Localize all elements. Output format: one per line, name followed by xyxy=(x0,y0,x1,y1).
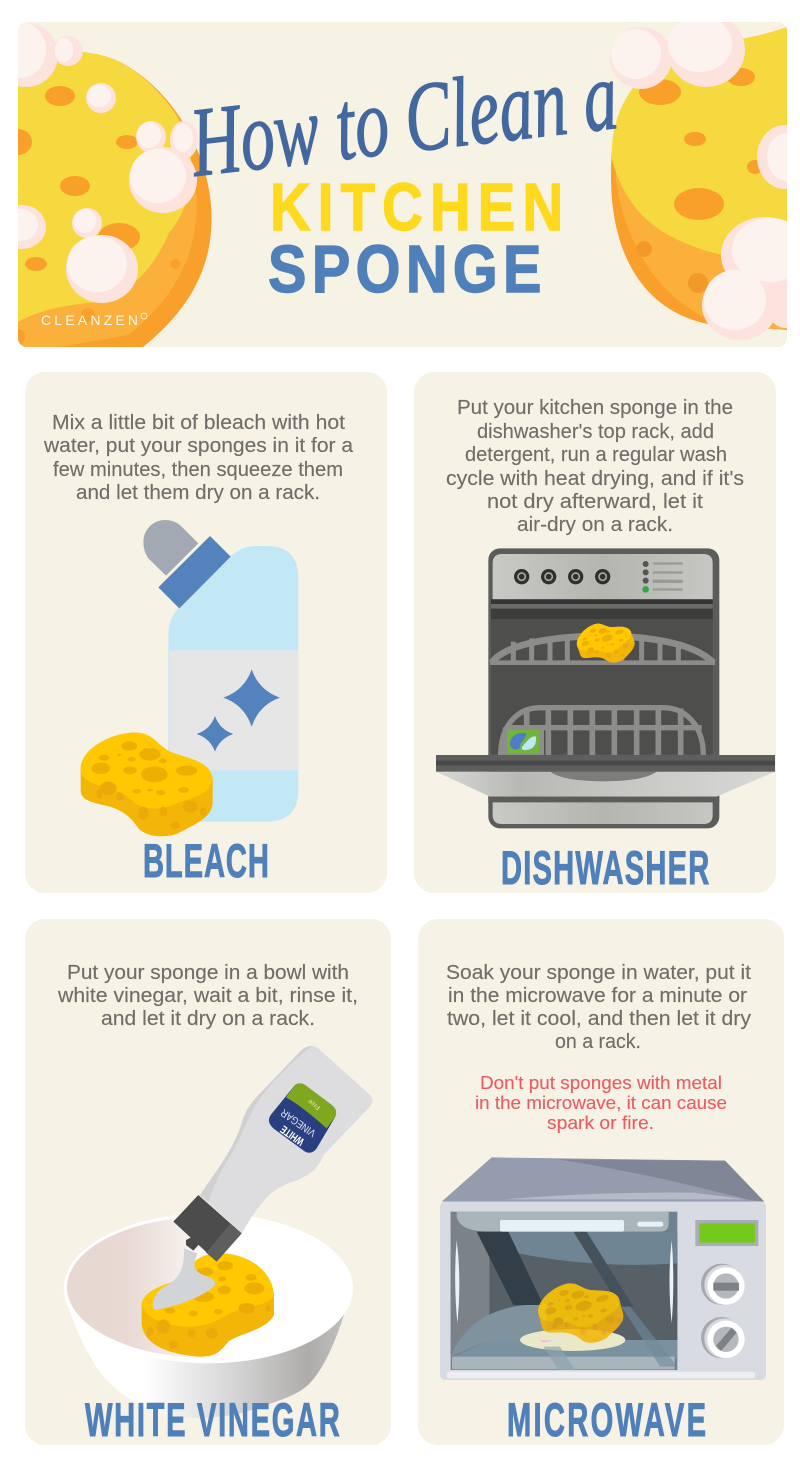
metal warning: spark or fire. xyxy=(547,1113,654,1133)
metal warning xyxy=(475,1073,727,1133)
dishwasher instructions: cycle with heat drying, and if it's xyxy=(446,468,744,490)
open door xyxy=(436,755,775,824)
dishwasher instructions xyxy=(446,397,744,536)
metal warning: Don't put sponges with metal xyxy=(480,1073,722,1093)
display xyxy=(695,1220,758,1246)
right sponge illustration xyxy=(610,13,800,340)
microwave instructions: in the microwave for a minute or xyxy=(448,985,747,1007)
vinegar instructions: and let it dry on a rack. xyxy=(101,1008,315,1030)
panel: white vinegar xyxy=(25,919,391,1447)
heading: white vinegar: WHITE VINEGAR xyxy=(85,1395,340,1447)
vinegar instructions: white vinegar, wait a bit, rinse it, xyxy=(57,985,358,1007)
heading: bleach: BLEACH xyxy=(143,836,269,888)
icon: microwave with sponge xyxy=(440,1157,766,1380)
left sponge illustration xyxy=(0,22,211,347)
metal warning: in the microwave, it can cause xyxy=(475,1093,727,1113)
dishwasher instructions: detergent, run a regular wash xyxy=(465,444,727,466)
vinegar bottle xyxy=(173,1046,372,1262)
icon: dishwasher with sponge xyxy=(436,548,775,828)
bottom rack xyxy=(501,708,703,755)
bottle label: VINEGAR xyxy=(279,1106,318,1139)
panel: microwave xyxy=(418,919,784,1447)
title SPONGE: SPONGE xyxy=(268,232,541,307)
sponge in bowl xyxy=(142,1253,274,1357)
dishwasher instructions: Put your kitchen sponge in the xyxy=(457,397,733,419)
bottle label: WHITE xyxy=(278,1122,307,1147)
microwave instructions xyxy=(446,962,751,1053)
left soap bubbles xyxy=(0,22,198,303)
icon: vinegar poured on sponge in bowl xyxy=(64,1046,372,1418)
bleach instructions: Mix a little bit of bleach with hot xyxy=(52,412,345,434)
dials xyxy=(701,1264,745,1358)
top rack xyxy=(490,636,715,663)
title KITCHEN: KITCHEN xyxy=(270,170,563,245)
microwave window xyxy=(451,1212,677,1370)
vinegar instructions xyxy=(57,962,358,1030)
sponge behind glass xyxy=(533,1272,628,1355)
bleach instructions: and let them dry on a rack. xyxy=(76,482,320,504)
detergent tablet xyxy=(503,727,544,756)
panel: dishwasher xyxy=(414,372,776,895)
heading: microwave: MICROWAVE xyxy=(507,1395,706,1447)
bleach instructions: water, put your sponges in it for a xyxy=(43,435,354,457)
dishwasher instructions: air-dry on a rack. xyxy=(517,514,673,536)
microwave instructions: two, let it cool, and then let it dry xyxy=(447,1008,751,1030)
bleach instructions xyxy=(43,412,354,504)
dishwasher instructions: not dry afterward, let it xyxy=(487,491,703,513)
vinegar instructions: Put your sponge in a bowl with xyxy=(67,962,349,984)
panel: bleach xyxy=(25,372,387,893)
microwave instructions: on a rack. xyxy=(555,1031,641,1053)
title script line: How to Clean a xyxy=(184,41,623,198)
bottle label xyxy=(269,1083,336,1153)
bottle label: Free xyxy=(307,1097,322,1111)
sponge on rack xyxy=(572,613,639,673)
icon: bleach bottle with sponge xyxy=(81,520,298,836)
heading: dishwasher: DISHWASHER xyxy=(501,843,709,895)
brand logo: CLEANZEN xyxy=(41,312,138,328)
microwave instructions: Soak your sponge in water, put it xyxy=(446,962,751,984)
vinegar stream xyxy=(153,1248,215,1310)
bleach instructions: few minutes, then squeeze them xyxy=(53,459,343,481)
dishwasher instructions: dishwasher's top rack, add xyxy=(477,421,714,443)
right soap bubbles xyxy=(610,13,800,340)
control knobs xyxy=(514,561,683,593)
header banner xyxy=(0,13,800,347)
